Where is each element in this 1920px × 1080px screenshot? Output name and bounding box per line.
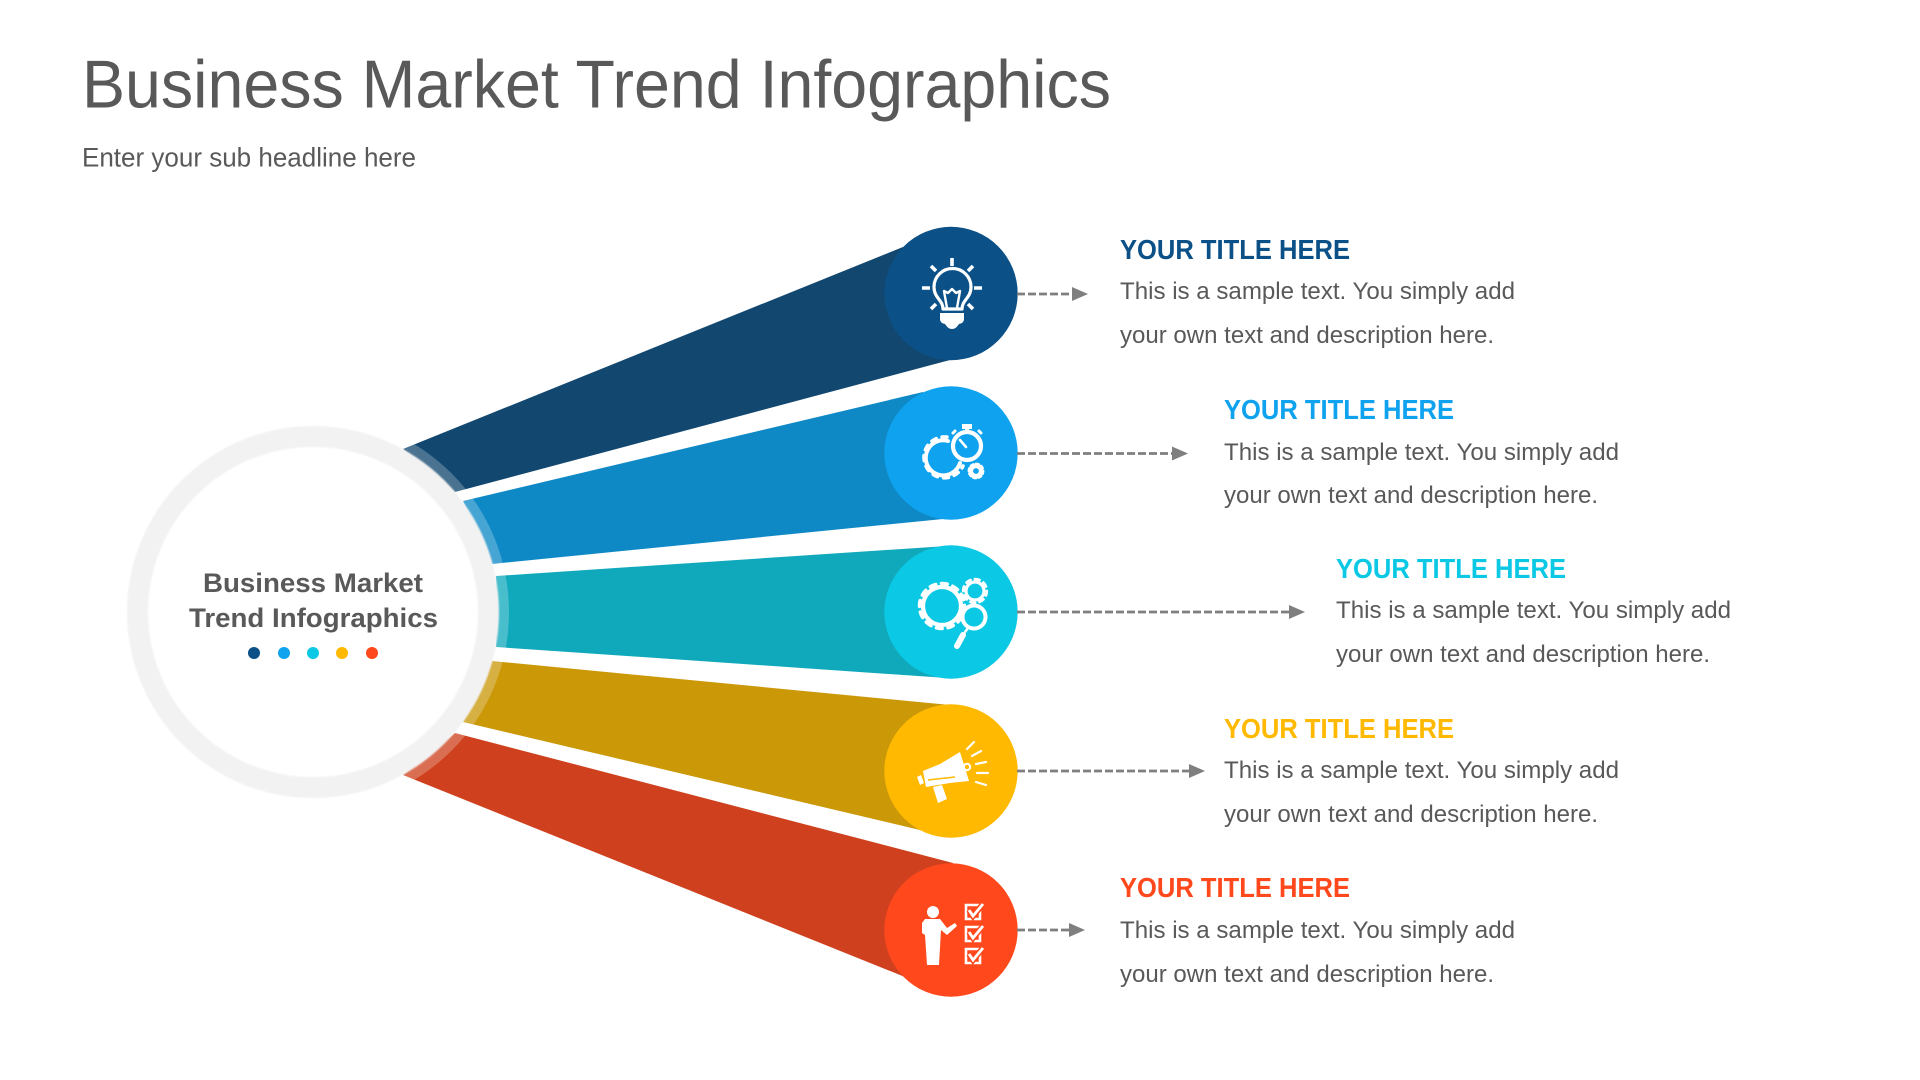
text block 5: This is a sample text. You simply add	[1120, 917, 1515, 944]
arrow 5	[1017, 923, 1085, 937]
text block 2	[1224, 394, 1619, 509]
text block 1: This is a sample text. You simply add	[1120, 278, 1515, 305]
node 3: gears and magnifier	[884, 545, 1018, 679]
text block 3: This is a sample text. You simply add	[1336, 597, 1731, 624]
central label: Trend Infographics	[189, 603, 438, 633]
band: red	[403, 733, 953, 977]
node 5: presenter and checklist	[884, 863, 1018, 997]
text block 2: your own text and description here.	[1224, 482, 1598, 509]
text block 3: your own text and description here.	[1336, 641, 1710, 668]
band: gold	[463, 661, 950, 830]
text block 5	[1120, 872, 1515, 988]
text block 5: your own text and description here.	[1120, 961, 1494, 988]
subtitle: Enter your sub headline here	[82, 142, 416, 172]
text block 5: YOUR TITLE HERE	[1120, 872, 1350, 903]
text block 1: your own text and description here.	[1120, 322, 1494, 349]
icon: light bulb	[922, 258, 982, 329]
title: Business Market Trend Infographics	[82, 46, 1111, 122]
text block 1	[1120, 234, 1515, 349]
icon: presenter and checklist	[922, 904, 983, 965]
node 2: gears and stopwatch	[884, 386, 1018, 520]
node 4: megaphone	[884, 704, 1018, 838]
band: navy	[403, 247, 950, 492]
text block 4: YOUR TITLE HERE	[1224, 713, 1454, 744]
colour dots	[248, 647, 378, 659]
band: blue	[463, 392, 943, 564]
arrow 1	[1017, 287, 1088, 301]
central circle	[117, 416, 509, 808]
band: teal	[496, 546, 947, 678]
node 1: light bulb	[884, 227, 1018, 360]
icon: gears and stopwatch	[924, 424, 983, 478]
text block 4: your own text and description here.	[1224, 801, 1598, 828]
text block 3: YOUR TITLE HERE	[1336, 553, 1566, 584]
text block 2: This is a sample text. You simply add	[1224, 439, 1619, 466]
text block 1: YOUR TITLE HERE	[1120, 234, 1350, 265]
text block 2: YOUR TITLE HERE	[1224, 394, 1454, 425]
text block 4: This is a sample text. You simply add	[1224, 757, 1619, 784]
text block 3	[1336, 553, 1731, 668]
icon: megaphone	[917, 742, 988, 803]
arrow 3	[1017, 605, 1305, 619]
arrow 2	[1017, 446, 1188, 460]
text block 4	[1224, 713, 1619, 828]
central label	[189, 568, 438, 633]
icon: gears and magnifier	[920, 579, 987, 646]
arrow 4	[1017, 764, 1205, 778]
central label: Business Market	[203, 568, 423, 598]
